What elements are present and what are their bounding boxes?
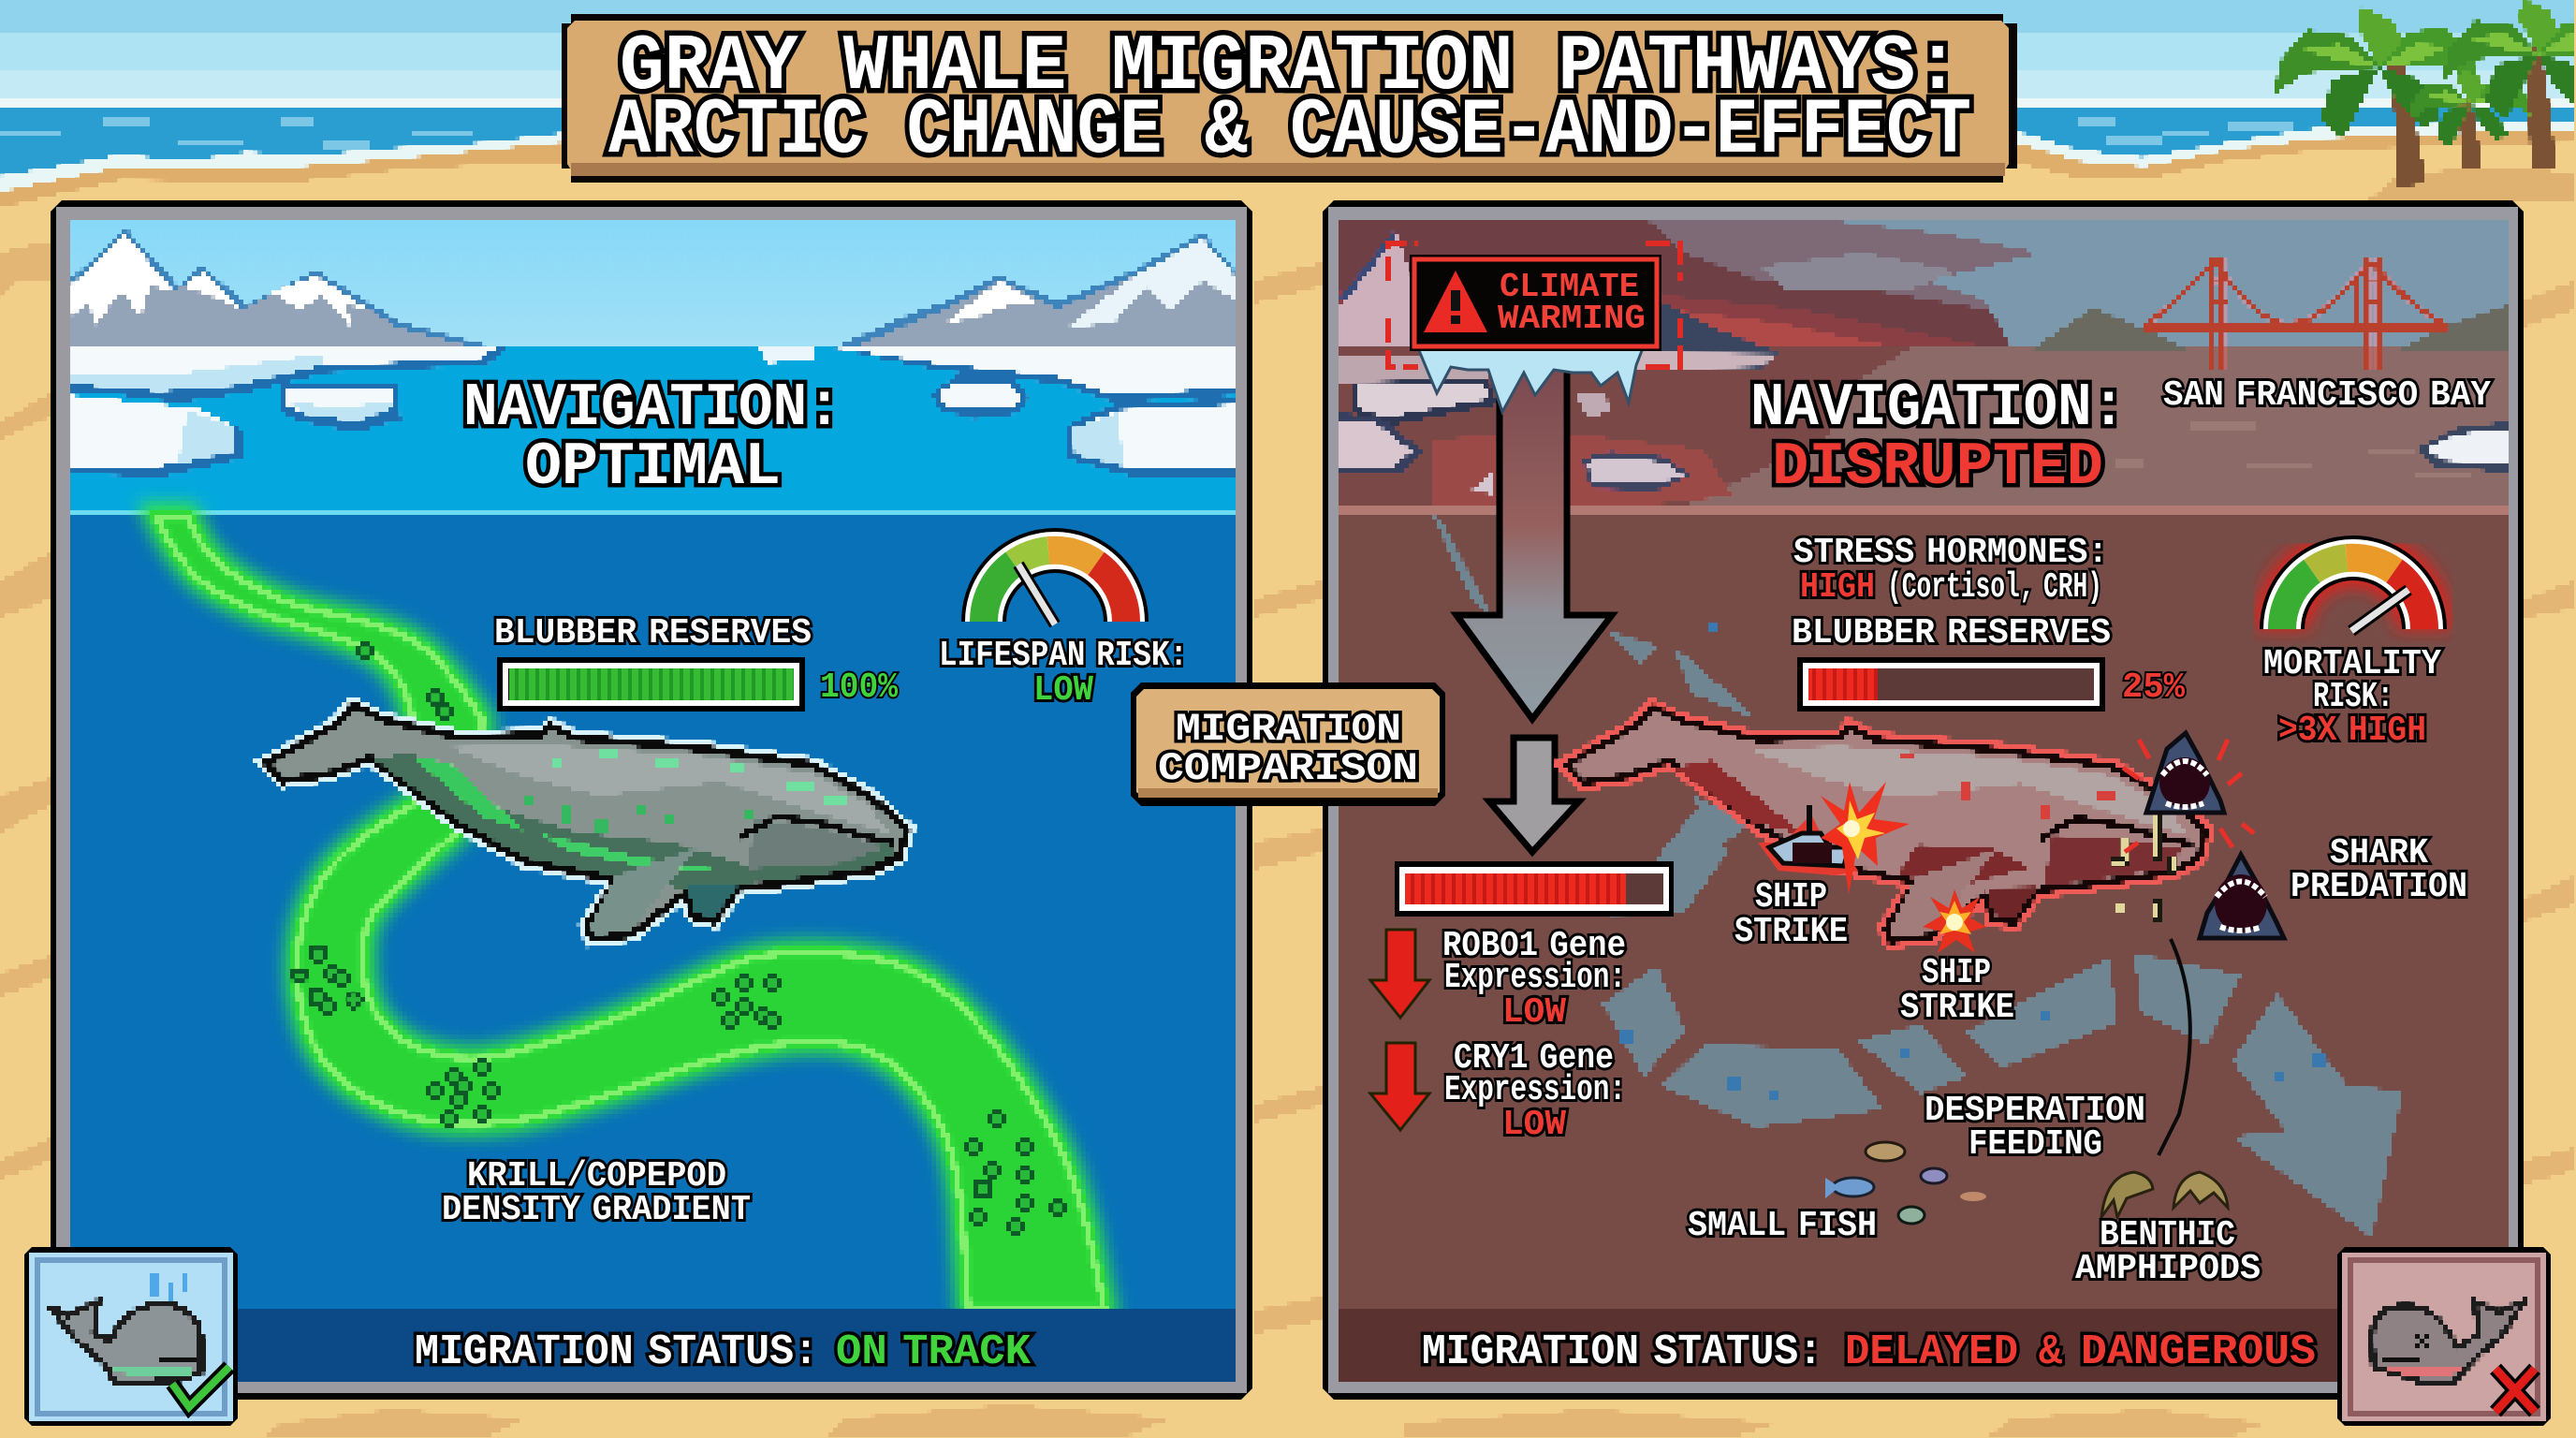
big arrow: warming down [1456,365,1612,719]
gene group: CRY1 [1370,1038,1626,1145]
left panel heading: OPTIMAL [525,433,781,502]
mortality risk gauge: RISK: [2313,677,2393,717]
climate warming sign: WARMING [1498,300,1646,338]
ship strike label 1 [1734,877,1848,952]
panel frame left [51,200,1252,1400]
migration status left [415,1328,1031,1376]
shark top [2123,733,2254,852]
desperation feeding label [1925,1091,2145,1165]
distant hills [2031,307,2190,350]
benthic amphipods [2101,1172,2228,1217]
arctic surface scene left [69,220,1236,1310]
migration status right [1422,1328,2316,1376]
shark bottom [2200,855,2284,938]
amphipods label [2075,1215,2261,1289]
krill label: KRILL/COPEPOD [467,1156,726,1196]
left panel heading [463,374,842,502]
status bar left [69,1309,1236,1382]
mortality risk gauge: >3X HIGH [2278,711,2426,751]
icon: distressed whale badge [2337,1247,2551,1426]
shark predation label: PREDATION [2291,867,2467,907]
migration status left: ON TRACK [836,1328,1031,1376]
desperation feeding label: DESPERATION [1925,1091,2145,1131]
feeding line [2159,939,2190,1155]
right panel heading [1750,374,2126,502]
shark predation label [2291,833,2467,907]
gene group: CRY1: Expression: [1444,1070,1626,1110]
ship strike label 2 [1900,953,2014,1028]
mortality risk gauge: MORTALITY [2263,644,2441,684]
stress hormones label: STRESS HORMONES: [1793,533,2108,573]
lifespan risk gauge [939,550,1188,711]
right panel heading: DISRUPTED [1772,433,2103,502]
blubber reserves right: 25% [2122,668,2185,708]
title text: GRAY WHALE MIGRATION PATHWAYS: [620,23,1960,112]
second arrow down [1489,738,1579,852]
panel: right disrupted [1323,200,2524,1400]
whale: injured [1566,707,2206,941]
blubber reserves left: BLUBBER RESERVES [494,613,812,653]
climate warming sign [1388,243,1680,412]
stress hormones label [1793,533,2108,608]
ship strike label 2: SHIP [1922,953,1991,993]
mountains left [69,227,501,348]
migration status right: & [2039,1328,2062,1376]
ship and strike explosion [1758,782,1910,894]
small fish [1825,1142,1986,1224]
amphipods label: BENTHIC [2100,1215,2235,1255]
mortality risk gauge [2263,558,2441,751]
comparison badge [1131,682,1445,806]
right panel heading: NAVIGATION: [1750,374,2126,443]
gene group: ROBO1 [1370,926,1626,1033]
climate warming sign: CLIMATE [1500,268,1639,306]
gene group: CRY1: LOW [1502,1105,1566,1145]
mountains right [833,232,1236,348]
blubber reserves left: 100% [820,668,898,708]
golden gate bridge [2142,259,2446,370]
icon: healthy whale badge [24,1247,238,1426]
ice shelves and floes [69,348,1236,479]
ship strike label 1: SHIP [1755,877,1827,917]
left panel heading: NAVIGATION: [463,374,842,443]
gene group: ROBO1: LOW [1502,992,1566,1033]
ship strike label 1: STRIKE [1734,912,1848,952]
gene bar [1395,861,1674,917]
gene group: ROBO1: ROBO1 Gene [1442,926,1626,966]
title text: ARCTIC CHANGE & CAUSE-AND-EFFECT [608,87,1971,176]
blubber reserves left [494,613,898,712]
krill clusters [293,645,1063,1233]
panel frame right [1323,200,2524,1400]
title text [608,23,1971,176]
lifespan risk gauge: LIFESPAN RISK: [939,636,1188,676]
blubber reserves right [1792,613,2185,712]
stress hormones label: HIGH [1800,567,1875,608]
density gradient label: DENSITY GRADIENT [442,1190,751,1230]
gene group: CRY1: CRY1 Gene [1454,1038,1614,1078]
title plaque [560,14,2016,183]
san francisco bay label: SAN FRANCISCO BAY [2163,375,2491,416]
whale: healthy [267,705,907,939]
amphipods label: AMPHIPODS [2075,1249,2261,1289]
desperation feeding label: FEEDING [1969,1124,2102,1165]
shark predation label: SHARK [2330,833,2428,873]
small fish label: SMALL FISH [1688,1206,1877,1246]
lifespan risk gauge: LOW [1033,670,1093,711]
comparison badge: MIGRATION [1176,707,1401,752]
ghost migration path [1432,515,2403,1238]
krill density path [156,516,1105,1309]
panel: left optimal [51,200,1252,1400]
comparison badge: COMPARISON [1158,746,1418,791]
status bar right [1339,1309,2509,1382]
palm trees [2274,0,2576,200]
melted ice [1339,229,2509,494]
stress hormones label: (Cortisol, CRH) [1887,567,2102,608]
second strike explosion [1923,889,1986,953]
migration status left: MIGRATION STATUS: [415,1328,818,1376]
migration status right: DELAYED [1845,1328,2018,1376]
gene group: ROBO1: Expression: [1444,958,1626,998]
polluted sky and bay scene [1339,220,2509,1310]
ship strike label 2: STRIKE [1900,988,2014,1028]
debris near mouth [2112,813,2177,919]
migration status right: DANGEROUS [2081,1328,2316,1376]
blubber reserves right: BLUBBER RESERVES [1792,613,2111,653]
migration status right: MIGRATION STATUS: [1422,1328,1822,1376]
